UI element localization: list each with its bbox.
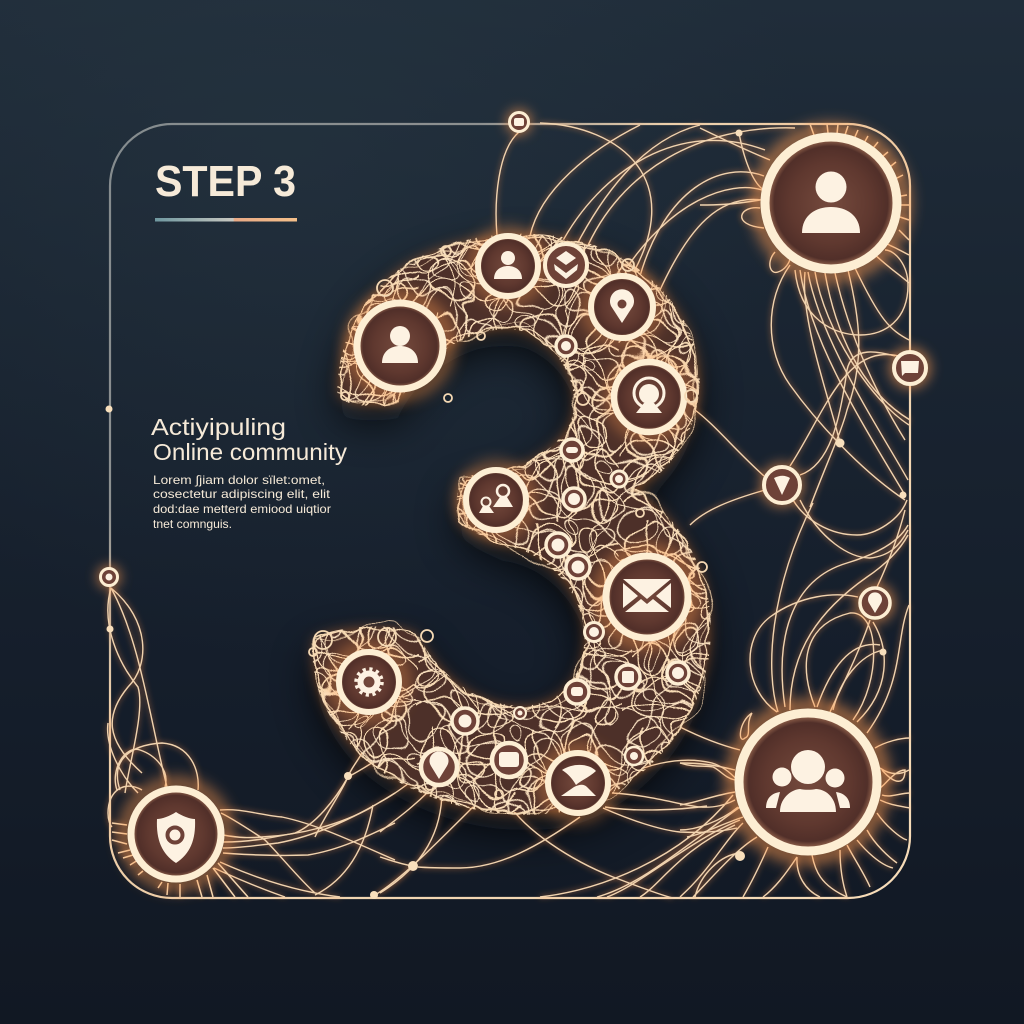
right node: device bbox=[889, 347, 931, 389]
text block: community description: cosectetur adipiscing elit, elit bbox=[153, 487, 331, 501]
right node: badge bbox=[760, 463, 804, 507]
node: chat bottom bbox=[492, 743, 526, 777]
node: two people bbox=[463, 467, 529, 533]
text block: community description bbox=[151, 414, 347, 531]
node: webcam person bbox=[611, 359, 687, 435]
top frame node bbox=[506, 109, 532, 135]
numeral 3 made of tangled threads bbox=[300, 220, 730, 830]
node: gear bbox=[335, 648, 403, 716]
node: chevrons bbox=[545, 244, 587, 286]
small numeral nodes bbox=[452, 336, 689, 765]
drop shadow of numeral 3 bbox=[315, 254, 708, 830]
node: map pin bbox=[588, 273, 656, 341]
node: hat bbox=[545, 750, 611, 816]
text block: community description: Lorem ∫jiam dolor sïlet:omet, bbox=[153, 473, 325, 487]
node: shield bbox=[126, 784, 226, 884]
text block: community description: Actiyipuling bbox=[151, 414, 286, 440]
left frame node bbox=[97, 565, 121, 589]
text block: community description: Online community bbox=[153, 439, 347, 465]
node: large group bbox=[733, 707, 883, 857]
corner spokes between large nodes and frame bbox=[112, 124, 909, 897]
small outline rings bbox=[309, 246, 707, 798]
node: large person bbox=[759, 131, 903, 275]
text block: community description: dod:dae metterd emiood uiqtior bbox=[153, 502, 331, 516]
connection wires bbox=[108, 123, 910, 898]
frame junction dots bbox=[106, 130, 906, 899]
text block: community description: tnet comnguis. bbox=[153, 517, 232, 531]
right node: pin bbox=[855, 583, 895, 623]
node: mail bbox=[601, 551, 693, 643]
node: person left of numeral bbox=[352, 298, 448, 394]
node: pin bottom bbox=[421, 749, 457, 785]
node: person top bbox=[475, 233, 541, 299]
step heading: STEP 3 bbox=[155, 157, 296, 206]
frame: rounded outline bbox=[110, 124, 910, 898]
